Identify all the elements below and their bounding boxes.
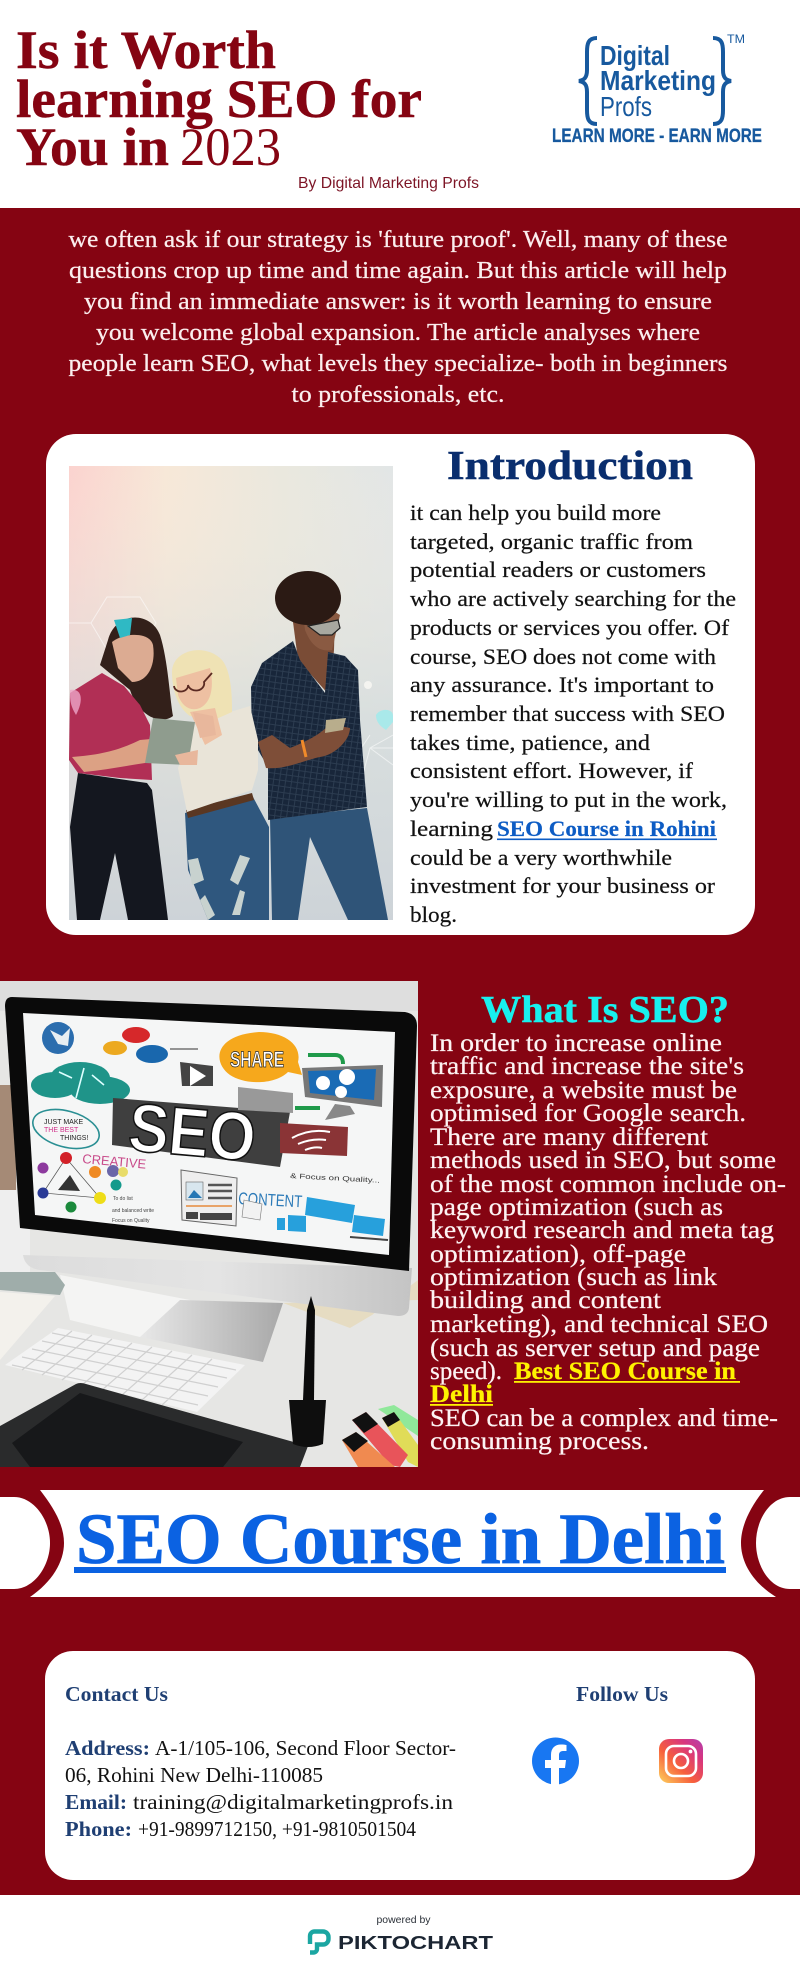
contact details: A-1/105-106, Second Floor Sector- [155, 1736, 456, 1760]
banner: SEO Course in Delhi [0, 1490, 800, 1597]
tablet [145, 718, 195, 765]
photo: computer monitor showing SEO sketch on a desk: Focus on Quality [112, 1218, 150, 1224]
contact details: Phone: [65, 1817, 132, 1841]
notebook [283, 1280, 418, 1328]
introduction text: learning [410, 816, 493, 841]
monitor stand [140, 1300, 283, 1362]
pen in holder [303, 1296, 315, 1400]
speech ellipse [32, 1108, 100, 1150]
what is SEO text: of the most common include on- [430, 1171, 786, 1198]
intro paragraph: you find an immediate answer: is it worth learning to ensure [84, 289, 712, 315]
banner link text: SEO Course in Delhi [76, 1499, 725, 1579]
right ribbon end [756, 1497, 800, 1589]
woman with tablet: shirt [69, 673, 152, 780]
man: glasses [308, 620, 340, 635]
introduction text: consistent effort. However, if [410, 758, 694, 783]
woman in sweater: jeans [185, 797, 269, 920]
logo: Digital Marketing Profs: Marketing [600, 65, 716, 96]
what is SEO text: keyword research and meta tag [430, 1217, 775, 1244]
man: jeans [270, 808, 388, 920]
monitor bezel [5, 997, 417, 1271]
introduction text: targeted, organic traffic from [410, 529, 694, 554]
introduction text: SEO Course in Rohini [497, 816, 716, 841]
what is SEO text: Delhi [430, 1381, 493, 1408]
what is SEO text: SEO can be a complex and time- [430, 1405, 778, 1432]
title: 2023 [180, 117, 281, 177]
contact details [65, 1736, 456, 1841]
man: skin [293, 622, 334, 691]
server [238, 1087, 293, 1113]
what is SEO text: consuming process. [430, 1428, 649, 1455]
maroon wifi card [280, 1123, 348, 1156]
intro paragraph: you welcome global expansion. The article analyses where [96, 320, 700, 346]
introduction text: it can help you build more [410, 500, 661, 525]
what is SEO text: optimization (such as link [430, 1264, 718, 1291]
what is SEO text: There are many different [430, 1124, 708, 1151]
contact card background [45, 1651, 755, 1880]
what is SEO text: traffic and increase the site's [430, 1053, 744, 1080]
what is SEO text: exposure, a website must be [430, 1077, 737, 1104]
intro paragraph [68, 227, 728, 408]
ribbon shape [30, 1490, 776, 1597]
introduction text: course, SEO does not come with [410, 644, 716, 669]
SEO band [112, 1098, 290, 1167]
byline: By Digital Marketing Profs [298, 175, 479, 192]
keyboard [5, 1328, 245, 1412]
man: shirt [251, 641, 367, 820]
heading: Introduction: Introduction [447, 442, 693, 488]
photo: three people looking at devices [69, 466, 393, 920]
photo: computer monitor showing SEO sketch on a desk: SHARE [230, 1047, 284, 1072]
title: Is it Worth [16, 20, 276, 80]
intro paragraph: to professionals, etc. [292, 382, 504, 408]
logo: Digital Marketing Profs: TM [727, 32, 745, 46]
photo: computer monitor showing SEO sketch on a desk: To do list [113, 1196, 133, 1202]
what is SEO text: (such as server setup and page [430, 1335, 760, 1362]
introduction text: potential readers or customers [410, 557, 706, 582]
card background [46, 434, 755, 935]
photo: computer monitor showing SEO sketch on a desk: THE BEST [44, 1127, 79, 1134]
intro paragraph: people learn SEO, what levels they specialize- both in beginners [68, 351, 728, 377]
heading: Contact Us: Contact Us [65, 1682, 168, 1706]
photo: computer monitor showing SEO sketch on a desk: and balanced write [112, 1208, 154, 1214]
play icon [180, 1062, 213, 1086]
layout box [181, 1170, 237, 1226]
what is SEO text: optimization), off-page [430, 1241, 686, 1268]
contact details: training@digitalmarketingprofs.in [133, 1790, 454, 1814]
arrows on screen [308, 1055, 343, 1064]
share bubble [219, 1032, 302, 1082]
heading: What Is SEO?: What Is SEO? [481, 989, 729, 1031]
title [16, 20, 422, 177]
footer: powered by Piktochart [310, 1915, 493, 1953]
blue settings monitor [302, 1065, 383, 1107]
what is SEO text: marketing), and technical SEO [430, 1311, 768, 1338]
what is SEO text: page optimization (such as [430, 1194, 723, 1221]
introduction text [410, 500, 736, 927]
contact details: 06, Rohini New Delhi-110085 [65, 1763, 323, 1787]
what is SEO text: Best SEO Course in [514, 1358, 736, 1385]
woman in sweater: hair and face [172, 650, 232, 720]
logo: Digital Marketing Profs: Profs [600, 91, 652, 122]
photo: computer monitor showing SEO sketch on a desk [0, 981, 418, 1467]
contact details: Address: [65, 1736, 150, 1760]
title: You in [16, 117, 169, 177]
icon: Piktochart mark [310, 1932, 328, 1953]
wordmark: PIKTOCHART [338, 1933, 493, 1953]
introduction text: you're willing to put in the work, [410, 787, 727, 812]
man: arm and phone [258, 724, 350, 768]
intro paragraph: we often ask if our strategy is 'future proof'. Well, many of these [68, 227, 728, 253]
what is SEO text: methods used in SEO, but some [430, 1147, 776, 1174]
monitor screen [23, 1013, 395, 1255]
what is SEO text: building and content [430, 1287, 661, 1314]
intro paragraph: questions crop up time and time again. But this article will help [69, 258, 727, 284]
introduction text: any assurance. It's important to [410, 672, 714, 697]
clouds [122, 1027, 150, 1043]
heading: Follow Us: Follow Us [576, 1682, 668, 1706]
icon: instagram [659, 1739, 703, 1783]
what is SEO text: speed). [430, 1358, 502, 1385]
SEO lettering: SEO [126, 1089, 259, 1176]
woman with tablet: face [112, 635, 154, 682]
what is SEO text: optimised for Google search. [430, 1100, 746, 1127]
panel: contact [45, 1651, 755, 1880]
markers [378, 1405, 418, 1436]
what is SEO text: In order to increase online [430, 1030, 722, 1057]
woman with tablet: arm [72, 739, 150, 772]
photo: computer monitor showing SEO sketch on a desk: & Focus on Quality... [290, 1173, 380, 1185]
powered by: powered by [376, 1915, 430, 1926]
coloured network diagram [38, 1152, 128, 1212]
monitor chin [23, 1255, 412, 1316]
introduction text: takes time, patience, and [410, 730, 650, 755]
photo: computer monitor showing SEO sketch on a desk: JUST MAKE [44, 1119, 83, 1126]
man: hair [275, 571, 341, 625]
left ribbon end [0, 1497, 50, 1589]
icon: facebook [532, 1738, 579, 1784]
panel: introduction [46, 434, 755, 935]
contact details: Email: [65, 1790, 127, 1814]
introduction text: remember that success with SEO [410, 701, 725, 726]
introduction text: who are actively searching for the [410, 586, 736, 611]
device icons [305, 1197, 355, 1223]
introduction text: could be a very worthwhile [410, 845, 672, 870]
introduction text: products or services you offer. Of [410, 615, 730, 640]
logo: Digital Marketing Profs [552, 32, 762, 147]
desk items left [0, 1272, 65, 1295]
drawing tablet [0, 1383, 308, 1467]
title: learning SEO for [16, 69, 422, 129]
teal cloud [31, 1062, 130, 1104]
contact details: +91-9899712150, +91-9810501504 [138, 1817, 416, 1841]
woman with tablet: pants [70, 773, 168, 920]
photo: computer monitor showing SEO sketch on a desk: CREATIVE [82, 1151, 147, 1172]
photo: computer monitor showing SEO sketch on a desk: THINGS! [60, 1135, 88, 1142]
what is SEO text [430, 1030, 786, 1455]
introduction text: blog. [410, 902, 457, 927]
woman with tablet: hair [100, 618, 173, 720]
introduction text: investment for your business or [410, 873, 716, 898]
woman in sweater: sweater [178, 706, 258, 812]
CONTENT label: CONTENT [238, 1189, 303, 1211]
globe [42, 1022, 74, 1054]
logo: Digital Marketing Profs: Digital [600, 40, 670, 71]
icons on photo [114, 618, 132, 638]
